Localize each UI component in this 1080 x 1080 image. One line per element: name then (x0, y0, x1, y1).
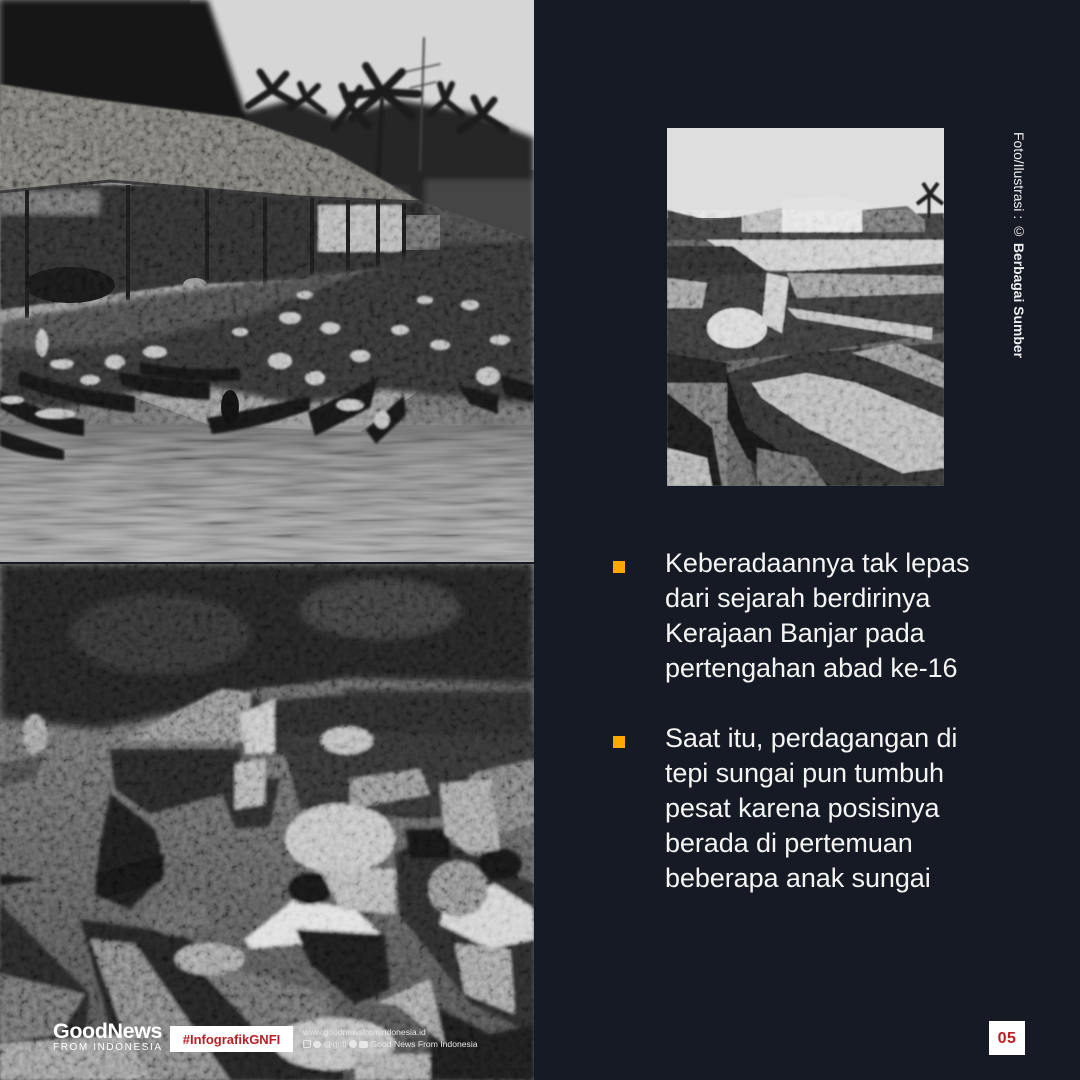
palm trees (248, 38, 506, 178)
hall interior (0, 185, 410, 310)
text block: perdagangan: tepi sungai pun tumbuh (665, 758, 944, 788)
water (0, 390, 534, 562)
website and social links (303, 1027, 478, 1048)
text block: kerajaan banjar: Kerajaan Banjar pada (665, 618, 925, 648)
website and social links: www.goodnewsfromindonesia.id (303, 1027, 426, 1037)
text block: kerajaan banjar: pertengahan abad ke-16 (665, 653, 958, 683)
hashtag label: #InfografikGNFI (183, 1032, 280, 1047)
text block: perdagangan (665, 723, 957, 893)
photo credit: Foto/Ilustrasi : © Berbagai Sumber (1011, 132, 1027, 358)
text block: perdagangan: beberapa anak sungai (665, 863, 931, 893)
bullet marker 1 (613, 561, 625, 573)
text block: perdagangan: pesat karena posisinya (665, 793, 939, 823)
logo: GoodNews from Indonesia: FROM INDONESIA (53, 1042, 163, 1053)
text block: perdagangan: berada di pertemuan (665, 828, 913, 858)
page number: 05 (998, 1030, 1016, 1047)
photo: boat traders on river (0, 564, 534, 1080)
text block: kerajaan banjar: dari sejarah berdirinya (665, 583, 930, 613)
social icons and handles: @gnfi Good News From Indonesia (324, 1038, 478, 1048)
photo: river port with buildings (667, 128, 944, 486)
logo: GoodNews from Indonesia: GoodNews (53, 1019, 162, 1043)
bullet marker 2 (613, 736, 625, 748)
page number (989, 1021, 1025, 1055)
text block: perdagangan: Saat itu, perdagangan di (665, 723, 957, 753)
crowded boats (0, 240, 534, 410)
riverbank (0, 268, 400, 360)
text block: kerajaan banjar: Keberadaannya tak lepas (665, 548, 969, 578)
hashtag label (170, 1026, 293, 1052)
photo: market under thatched hall (0, 0, 534, 562)
thatched roof (0, 84, 422, 202)
text block: kerajaan banjar (665, 548, 969, 683)
